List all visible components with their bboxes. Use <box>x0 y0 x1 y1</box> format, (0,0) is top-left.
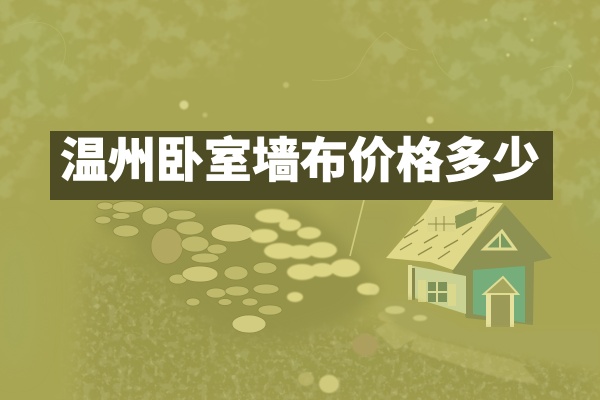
dull mushrooms left <box>95 201 282 333</box>
backing shadow for mushroom cluster <box>100 204 410 340</box>
darker ground under the mushrooms <box>80 220 600 400</box>
foreground brush over the house base <box>372 300 600 370</box>
title: 温州卧室墙布价格多少 <box>60 135 540 188</box>
forest light specks <box>180 18 571 124</box>
roof <box>386 200 503 270</box>
foliage mottling <box>0 0 600 240</box>
twig <box>350 200 364 256</box>
dormer <box>425 200 478 232</box>
side wall <box>408 265 466 314</box>
front teal panel <box>473 266 525 323</box>
foliage strokes <box>10 22 573 100</box>
door porch <box>484 277 518 327</box>
side window with shutters <box>418 280 456 306</box>
gable triangle window <box>484 231 515 249</box>
rocks / debris lower right <box>298 310 540 393</box>
house shadow wall <box>452 205 552 325</box>
ground texture <box>75 252 598 400</box>
mushroom cluster <box>95 201 379 333</box>
bright mushrooms right <box>250 209 379 302</box>
miniature house <box>386 200 552 327</box>
title banner <box>50 131 553 200</box>
